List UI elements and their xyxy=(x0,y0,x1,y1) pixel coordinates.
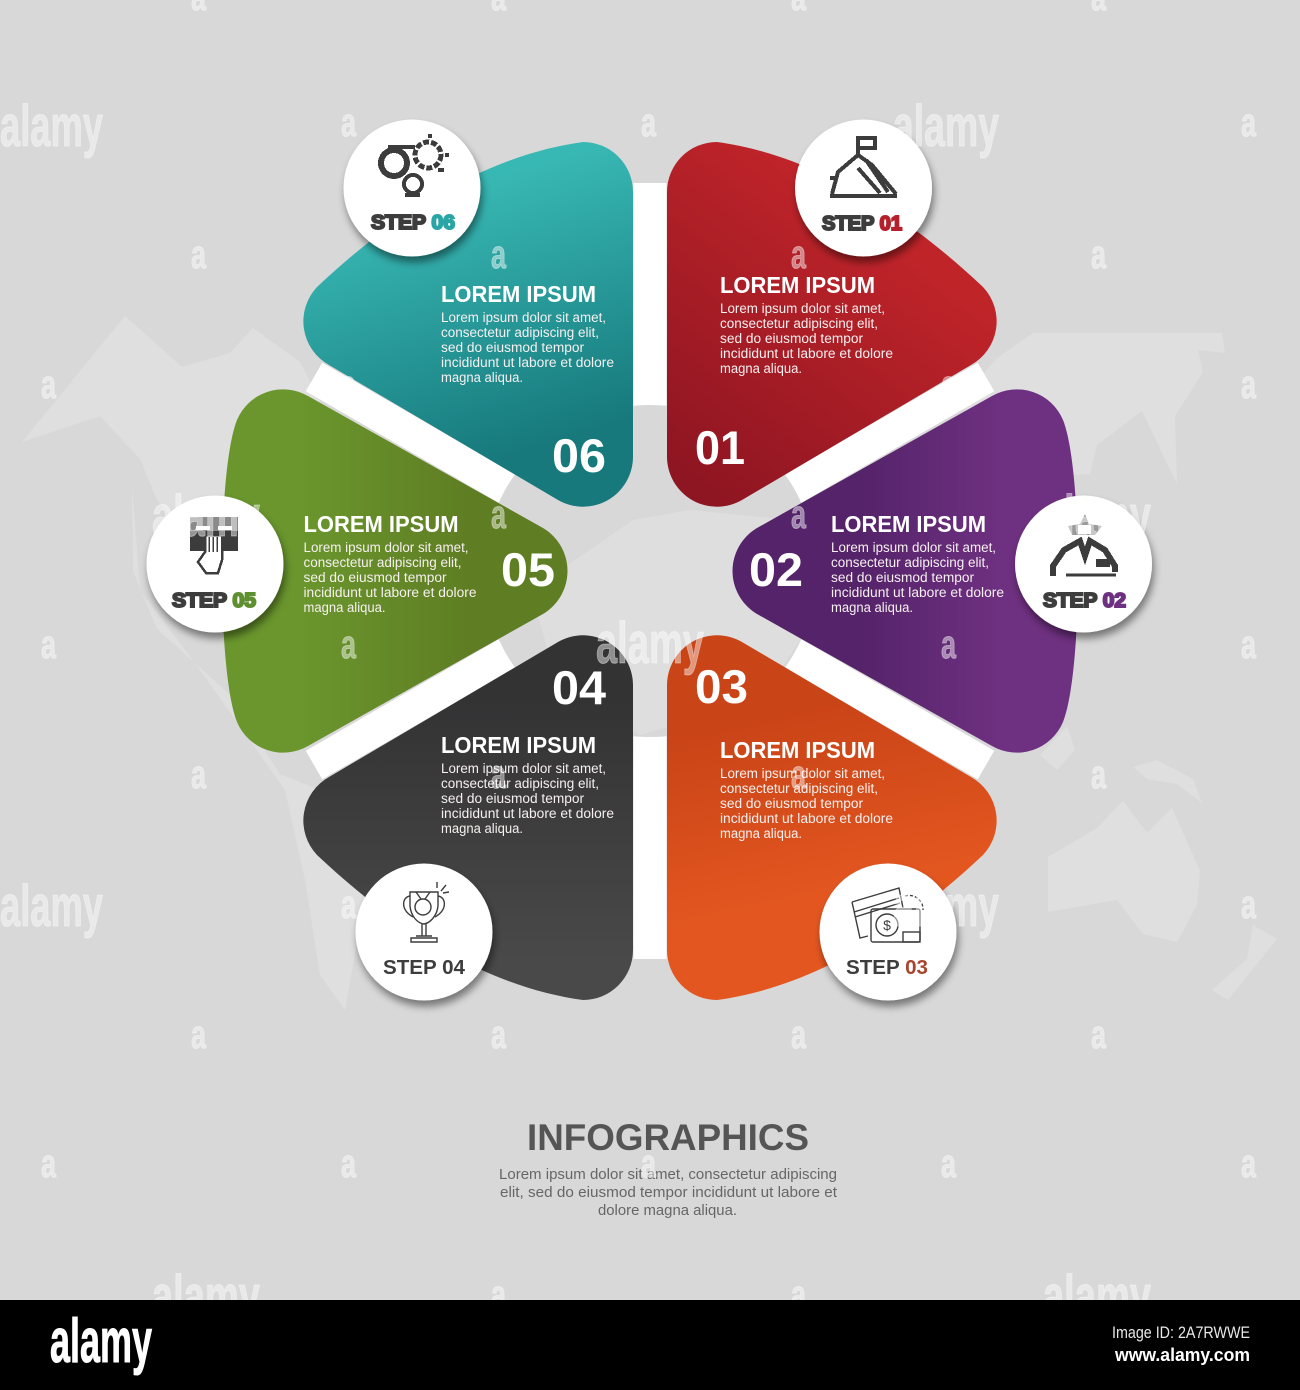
icon badge: gears, step 06 xyxy=(344,120,480,256)
watermarks: a xyxy=(1241,623,1257,667)
watermarks: alamy xyxy=(0,94,103,159)
watermarks: a xyxy=(641,101,657,145)
watermarks: a xyxy=(941,363,957,407)
number 05: 05 xyxy=(501,543,555,596)
step label 05: STEP 05 xyxy=(172,590,256,612)
heading 03: LOREM IPSUM xyxy=(720,737,875,763)
watermarks: a xyxy=(941,1142,957,1186)
watermarks: a xyxy=(791,753,807,797)
heading 06: LOREM IPSUM xyxy=(441,281,596,307)
watermarks: alamy xyxy=(0,874,103,939)
watermarks: a xyxy=(341,363,357,407)
description text: dolore magna aliqua. xyxy=(598,1203,737,1219)
watermarks: a xyxy=(491,493,507,537)
watermarks: a xyxy=(191,753,207,797)
watermarks: a xyxy=(1091,753,1107,797)
number 01: 01 xyxy=(695,421,745,474)
spokes and central ring xyxy=(314,183,986,959)
watermarks: a xyxy=(491,1013,507,1057)
watermarks: a xyxy=(791,1273,807,1317)
panel: step 01 xyxy=(667,120,997,507)
watermarks: a xyxy=(41,363,57,407)
panel: step 06 xyxy=(303,120,633,507)
watermarks: a xyxy=(341,623,357,667)
watermarks: a xyxy=(1241,101,1257,145)
watermarks: a xyxy=(791,493,807,537)
icon: mountain with flag xyxy=(830,138,897,196)
watermarks: a xyxy=(491,1273,507,1317)
number 06: 06 xyxy=(552,429,606,482)
panel: step 05 xyxy=(146,389,567,753)
watermarks: a xyxy=(641,883,657,927)
watermarks: a xyxy=(191,1013,207,1057)
watermarks: a xyxy=(341,883,357,927)
watermarks: a xyxy=(491,753,507,797)
watermarks: a xyxy=(641,1142,657,1186)
watermarks: alamy xyxy=(152,484,260,549)
icon: gears xyxy=(381,134,449,195)
heading 01: LOREM IPSUM xyxy=(720,272,875,298)
icon badge: trophy, step 04 xyxy=(356,864,492,1000)
step label 01: STEP 01 xyxy=(822,213,902,235)
watermarks: a xyxy=(491,233,507,277)
watermarks: a xyxy=(341,101,357,145)
watermarks: a xyxy=(41,623,57,667)
icon badge: hand, step 05 xyxy=(146,496,284,632)
step label 03: STEP 03 xyxy=(846,957,928,979)
step label 06: STEP 06 xyxy=(371,212,455,234)
description text xyxy=(499,1167,837,1219)
body text 05 xyxy=(304,540,476,615)
description text: elit, sed do eiusmod tempor incididunt ut labore et xyxy=(500,1185,837,1201)
description text: Lorem ipsum dolor sit amet, consectetur adipiscing xyxy=(499,1167,837,1183)
body text 06 xyxy=(441,310,614,385)
number 03: 03 xyxy=(695,660,748,713)
world map backdrop xyxy=(22,316,1277,1010)
footer logo: alamy xyxy=(50,1307,152,1376)
panel: step 04 xyxy=(303,635,633,1000)
website: www.alamy.com xyxy=(1114,1345,1250,1365)
body text 03 xyxy=(720,766,893,841)
watermarks: alamy xyxy=(893,94,999,159)
watermarks: a xyxy=(1091,1013,1107,1057)
watermarks: alamy xyxy=(893,874,999,939)
watermarks: a xyxy=(1241,1142,1257,1186)
body text 02 xyxy=(831,540,1004,615)
watermarks: a xyxy=(1241,363,1257,407)
icon: person with star xyxy=(1053,514,1116,576)
body text 01 xyxy=(720,301,893,376)
heading 04: LOREM IPSUM xyxy=(441,732,596,758)
body text 04 xyxy=(441,761,614,836)
icon badge: mountain flag, step 01 xyxy=(795,120,932,256)
watermarks: alamy xyxy=(152,1264,260,1329)
watermarks: a xyxy=(1091,233,1107,277)
watermarks: a xyxy=(341,1142,357,1186)
step label 02: STEP 02 xyxy=(1043,590,1126,612)
icon: trophy xyxy=(404,882,449,942)
icon badge: cards, step 03 xyxy=(820,864,956,1000)
watermarks: a xyxy=(791,233,807,277)
panel: step 02 xyxy=(733,389,1152,753)
panel: step 03 xyxy=(667,635,997,1000)
watermarks: alamy xyxy=(1043,1264,1151,1329)
watermarks: a xyxy=(791,1013,807,1057)
watermarks: a xyxy=(191,233,207,277)
watermarks: a xyxy=(41,1142,57,1186)
watermarks: a xyxy=(941,623,957,667)
watermarks: alamy xyxy=(1043,484,1151,549)
number 04: 04 xyxy=(552,661,606,714)
icon: hand on card xyxy=(190,517,238,573)
step label 04: STEP 04 xyxy=(383,957,466,979)
watermarks: alamy xyxy=(596,611,704,676)
icon badge: person, step 02 xyxy=(1015,496,1152,632)
heading 02: LOREM IPSUM xyxy=(831,511,986,537)
icon: credit cards and coin: $ xyxy=(883,917,891,933)
heading 05: LOREM IPSUM xyxy=(304,511,458,537)
image id: Image ID: 2A7RWWE xyxy=(1112,1323,1250,1342)
watermarks: a xyxy=(1241,883,1257,927)
title: INFOGRAPHICS xyxy=(527,1117,809,1158)
number 02: 02 xyxy=(749,543,803,596)
footer bar xyxy=(0,1300,1300,1390)
